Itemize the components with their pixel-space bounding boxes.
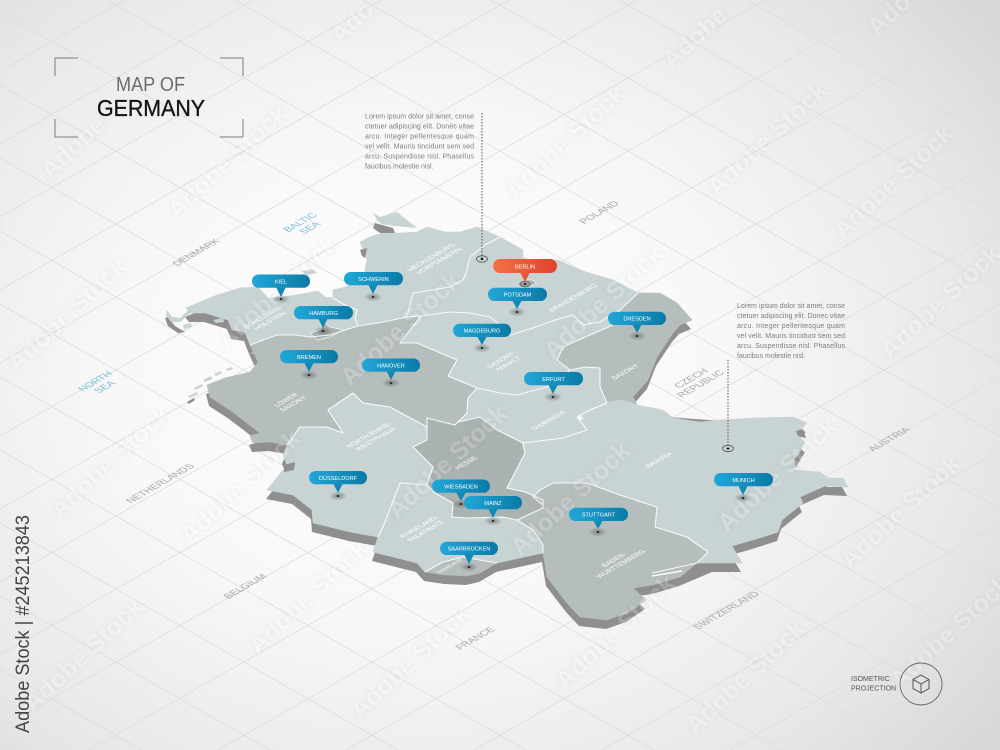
- region labels: SCHLESWIG-: [242, 305, 285, 330]
- stock watermarks: Adobe Stock: [702, 77, 833, 201]
- region: Schleswig-Holstein: [186, 287, 358, 345]
- pin: Saarbrücken: SAARBRÜCKEN: [448, 546, 490, 553]
- stock watermarks: Adobe Stock: [212, 230, 343, 354]
- region: Mecklenburg-Vorpommern: [333, 227, 500, 326]
- region: Hamburg: [310, 322, 343, 340]
- region labels: BADEN-: [601, 552, 629, 568]
- stock watermarks: Adobe Stock: [335, 267, 466, 391]
- region: Rhineland-Palatinate: [373, 483, 543, 572]
- stock watermarks: Adobe Stock: [828, 120, 959, 244]
- region labels: WÜRTTEMBERG: [594, 549, 648, 579]
- text block: right lorem ipsum: arcu. Suspendisse nisl. Phasellus: [737, 343, 846, 350]
- pin: Wiesbaden: WIESBADEN: [444, 484, 478, 490]
- stock watermarks: Adobe: [657, 1, 733, 74]
- region labels: NORTH RHINE-: [345, 421, 394, 449]
- pin: Schwerin: SCHWERIN: [358, 277, 389, 283]
- stock watermarks: Adobe: [35, 111, 111, 184]
- region labels: PALATINATE: [406, 519, 447, 543]
- country and sea labels: [76, 200, 914, 652]
- region labels: VORPOMMERN: [415, 247, 464, 276]
- pin: Dresden: DRESDEN: [623, 317, 651, 323]
- map extrusion: [185, 296, 847, 629]
- pin: Munich: [714, 473, 773, 502]
- text block: upper lorem ipsum: ctetuer adipiscing elit. Donec vitae: [365, 124, 474, 130]
- country and sea labels: REPUBLIC: [675, 369, 728, 399]
- title: map of: MAP OF: [116, 74, 185, 96]
- country and sea labels: AUSTRIA: [866, 426, 914, 453]
- region: Thuringia: [458, 367, 607, 443]
- country and sea labels: SEA: [92, 379, 119, 395]
- country and sea labels: DENMARK: [170, 237, 224, 268]
- stock watermarks: Adobe Stock: [243, 535, 374, 659]
- text block: upper lorem ipsum: arcu. Integer pellentesque quam: [365, 134, 474, 140]
- state borders: [250, 237, 708, 576]
- region: Lower Saxony: [207, 316, 477, 445]
- isometric projection label: ISOMETRIC: [851, 676, 890, 683]
- pin: Düsseldorf: DÜSSELDORF: [319, 475, 358, 482]
- stock id text: Adobe Stock | #245213843: [13, 515, 34, 733]
- pin: Mainz: MAINZ: [484, 501, 502, 507]
- isometric projection label: [851, 676, 896, 692]
- pin: Hamburg: HAMBURG: [309, 311, 338, 317]
- pin: Bremen: BREMEN: [297, 355, 321, 361]
- pin: Dresden: [608, 312, 666, 340]
- title block: [55, 58, 243, 137]
- region labels: THURINGIA: [530, 410, 568, 432]
- region: North Rhine-Westphalia: [267, 393, 433, 537]
- pin: Munich: MUNICH: [732, 478, 755, 484]
- country and sea labels: BALTIC: [281, 211, 320, 234]
- patch: Bavaria eastern dark border: [794, 429, 806, 468]
- stock watermarks: Adobe Stock: [538, 240, 669, 364]
- pin: Stuttgart: [569, 508, 628, 536]
- stock watermarks: Adobe Stock: [712, 413, 843, 537]
- pin: Düsseldorf: [309, 471, 367, 500]
- text block: right lorem ipsum: ctetuer adipiscing elit. Donec vitae: [737, 313, 845, 320]
- stock watermarks: Adobe Stock: [175, 425, 306, 549]
- region: East Frisian islands: [187, 367, 233, 404]
- patch: Rhine estuary dark coast: [284, 462, 295, 472]
- region labels: SAARLAND: [436, 558, 465, 575]
- pin: Hanover: [362, 358, 420, 388]
- region labels: BRANDENBURG: [548, 283, 600, 313]
- city pins: [252, 259, 773, 572]
- text block: upper lorem ipsum: arcu. Suspendisse nisl. Phasellus: [365, 154, 474, 160]
- map: German states: [165, 212, 848, 620]
- region labels: MECKLENBURG-: [406, 242, 459, 273]
- pin: Stuttgart: STUTTGART: [582, 513, 616, 519]
- pin: Potsdam: POTSDAM: [504, 293, 532, 299]
- text block: right lorem ipsum: faucibus molestie nisl.: [737, 353, 806, 360]
- region: Brandenburg: [407, 237, 638, 335]
- dotted leader: right text to marker: [722, 360, 734, 452]
- pin: Saarbrücken: [440, 542, 498, 572]
- region: Saxony-Anhalt: [400, 310, 620, 395]
- country and sea labels: POLAND: [577, 200, 622, 226]
- stock watermarks: Adobe Stock: [345, 600, 476, 724]
- country and sea labels: NORTH: [76, 370, 116, 393]
- stock watermarks: Adobe Stock: [505, 437, 636, 561]
- text block: upper lorem ipsum: [365, 114, 474, 170]
- pin: Wiesbaden: [432, 480, 490, 508]
- title: Germany: GERMANY: [97, 95, 205, 121]
- text block: upper lorem ipsum: faucibus molestie nisl.: [365, 164, 434, 170]
- region labels: SAXONY: [610, 363, 641, 381]
- region labels: BAVARIA: [644, 451, 675, 469]
- text block: right lorem ipsum: arcu. Integer pellentesque quam: [737, 323, 845, 330]
- country and sea labels: SWITZERLAND: [691, 590, 763, 631]
- pin: Mainz: [464, 496, 522, 526]
- pin: Kiel: [252, 274, 310, 304]
- region labels: SAXONY: [278, 395, 309, 413]
- text block: right lorem ipsum: [737, 303, 846, 360]
- region: Hesse: [413, 417, 543, 520]
- pin: Schwerin: [344, 272, 403, 302]
- region labels: [242, 242, 675, 579]
- region: Saarland: [425, 557, 497, 576]
- region: Rügen island: [360, 212, 417, 258]
- stock watermarks: Adobe Stock: [550, 570, 681, 694]
- country and sea labels: CZECH: [672, 367, 711, 390]
- icon: isometric cube: [900, 663, 942, 705]
- country and sea labels: NETHERLANDS: [124, 462, 198, 505]
- dotted leader: upper text to marker: [476, 113, 488, 262]
- stock watermarks: Adobe Stock: [162, 100, 293, 224]
- stock watermarks: Adobe Stock: [2, 253, 133, 377]
- region: Bavaria: [507, 400, 848, 563]
- region: Baden-Württemberg: [517, 483, 708, 620]
- country and sea labels: FRANCE: [453, 626, 499, 652]
- isometric projection label: PROJECTION: [851, 686, 896, 692]
- stock watermarks: Adobe Stock: [680, 615, 811, 739]
- region labels: SAXONY-: [486, 351, 518, 369]
- region: Saxony: [557, 293, 692, 405]
- text block: upper lorem ipsum: vel velit. Mauris tincidunt sem sed: [365, 144, 474, 150]
- pin: Bremen: [280, 350, 338, 380]
- region labels: HESSE: [454, 456, 480, 471]
- country and sea labels: SEA: [297, 220, 324, 236]
- stock watermarks: Adobe Stock: [835, 450, 966, 574]
- stock watermarks: Adobe Stock: [18, 593, 149, 717]
- pin: Hanover: HANOVER: [377, 364, 405, 370]
- text block: upper lorem ipsum: Lorem ipsum dolor sit amet, conse: [365, 114, 474, 120]
- pin: Kiel: KIEL: [275, 280, 287, 286]
- pin: Magdeburg: MAGDEBURG: [464, 329, 500, 335]
- stock watermarks: Adobe Stock: [45, 400, 176, 524]
- pin: Potsdam: [488, 288, 547, 316]
- pin: Berlin: [493, 259, 557, 287]
- region: Schleswig-Holstein islands: [165, 269, 317, 333]
- pin: Erfurt: [524, 372, 583, 402]
- region labels: RHINELAND-: [399, 515, 441, 539]
- pin: Berlin: BERLIN: [515, 264, 535, 270]
- text block: right lorem ipsum: vel velit. Mauris tincidunt sem sed: [737, 333, 845, 340]
- pin: Hamburg: [294, 306, 353, 336]
- region labels: LOWER: [273, 392, 301, 408]
- stock watermarks: Adobe Stock: [382, 400, 513, 524]
- stock watermarks: Adobe Stock: [500, 80, 631, 204]
- pin: Magdeburg: [453, 324, 511, 352]
- pin: Erfurt: ERFURT: [542, 377, 565, 383]
- region labels: ANHALT: [494, 356, 523, 373]
- region labels: HOLSTEIN: [253, 311, 288, 331]
- country and sea labels: BELGIUM: [222, 573, 270, 601]
- region labels: WESTPHALIA: [355, 426, 399, 452]
- text block: right lorem ipsum: Lorem ipsum dolor sit amet, conse: [737, 303, 845, 310]
